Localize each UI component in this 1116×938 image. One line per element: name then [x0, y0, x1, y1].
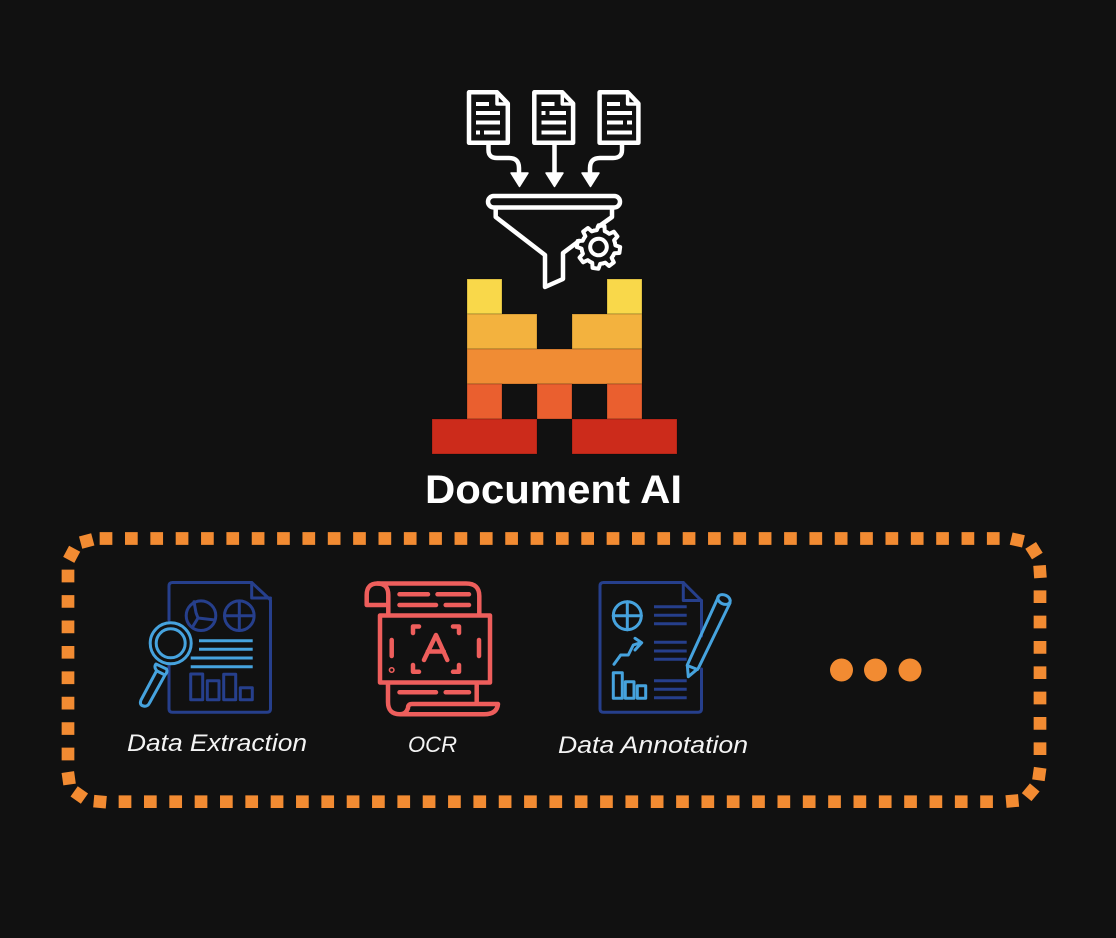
icon: document left	[469, 92, 508, 143]
icon: data annotation	[600, 582, 732, 712]
arrow: right document to funnel	[582, 145, 622, 186]
icon: document middle	[534, 92, 573, 143]
text lines and magnifier	[140, 623, 253, 706]
arrow: left document to funnel	[488, 145, 528, 186]
label: OCR: OCR	[408, 732, 457, 757]
icon: data extraction	[140, 582, 270, 712]
label: data annotation: Data Annotation	[558, 732, 748, 759]
arrow: middle document to funnel	[546, 145, 563, 186]
title: Document AI	[425, 468, 682, 512]
icon: OCR scroll	[367, 584, 498, 714]
icon: funnel	[488, 196, 620, 287]
icon: document funnel	[469, 92, 638, 287]
ellipsis: more capabilities	[830, 658, 922, 682]
icon: gear	[574, 223, 623, 271]
logo: stacked block M	[432, 279, 677, 454]
panel: dotted capabilities border	[62, 532, 1047, 809]
label: data extraction: Data Extraction	[127, 730, 307, 757]
document outline	[169, 582, 270, 712]
chart marks and pencil	[613, 593, 732, 698]
document outline	[600, 582, 702, 712]
icon: document right	[600, 92, 638, 143]
